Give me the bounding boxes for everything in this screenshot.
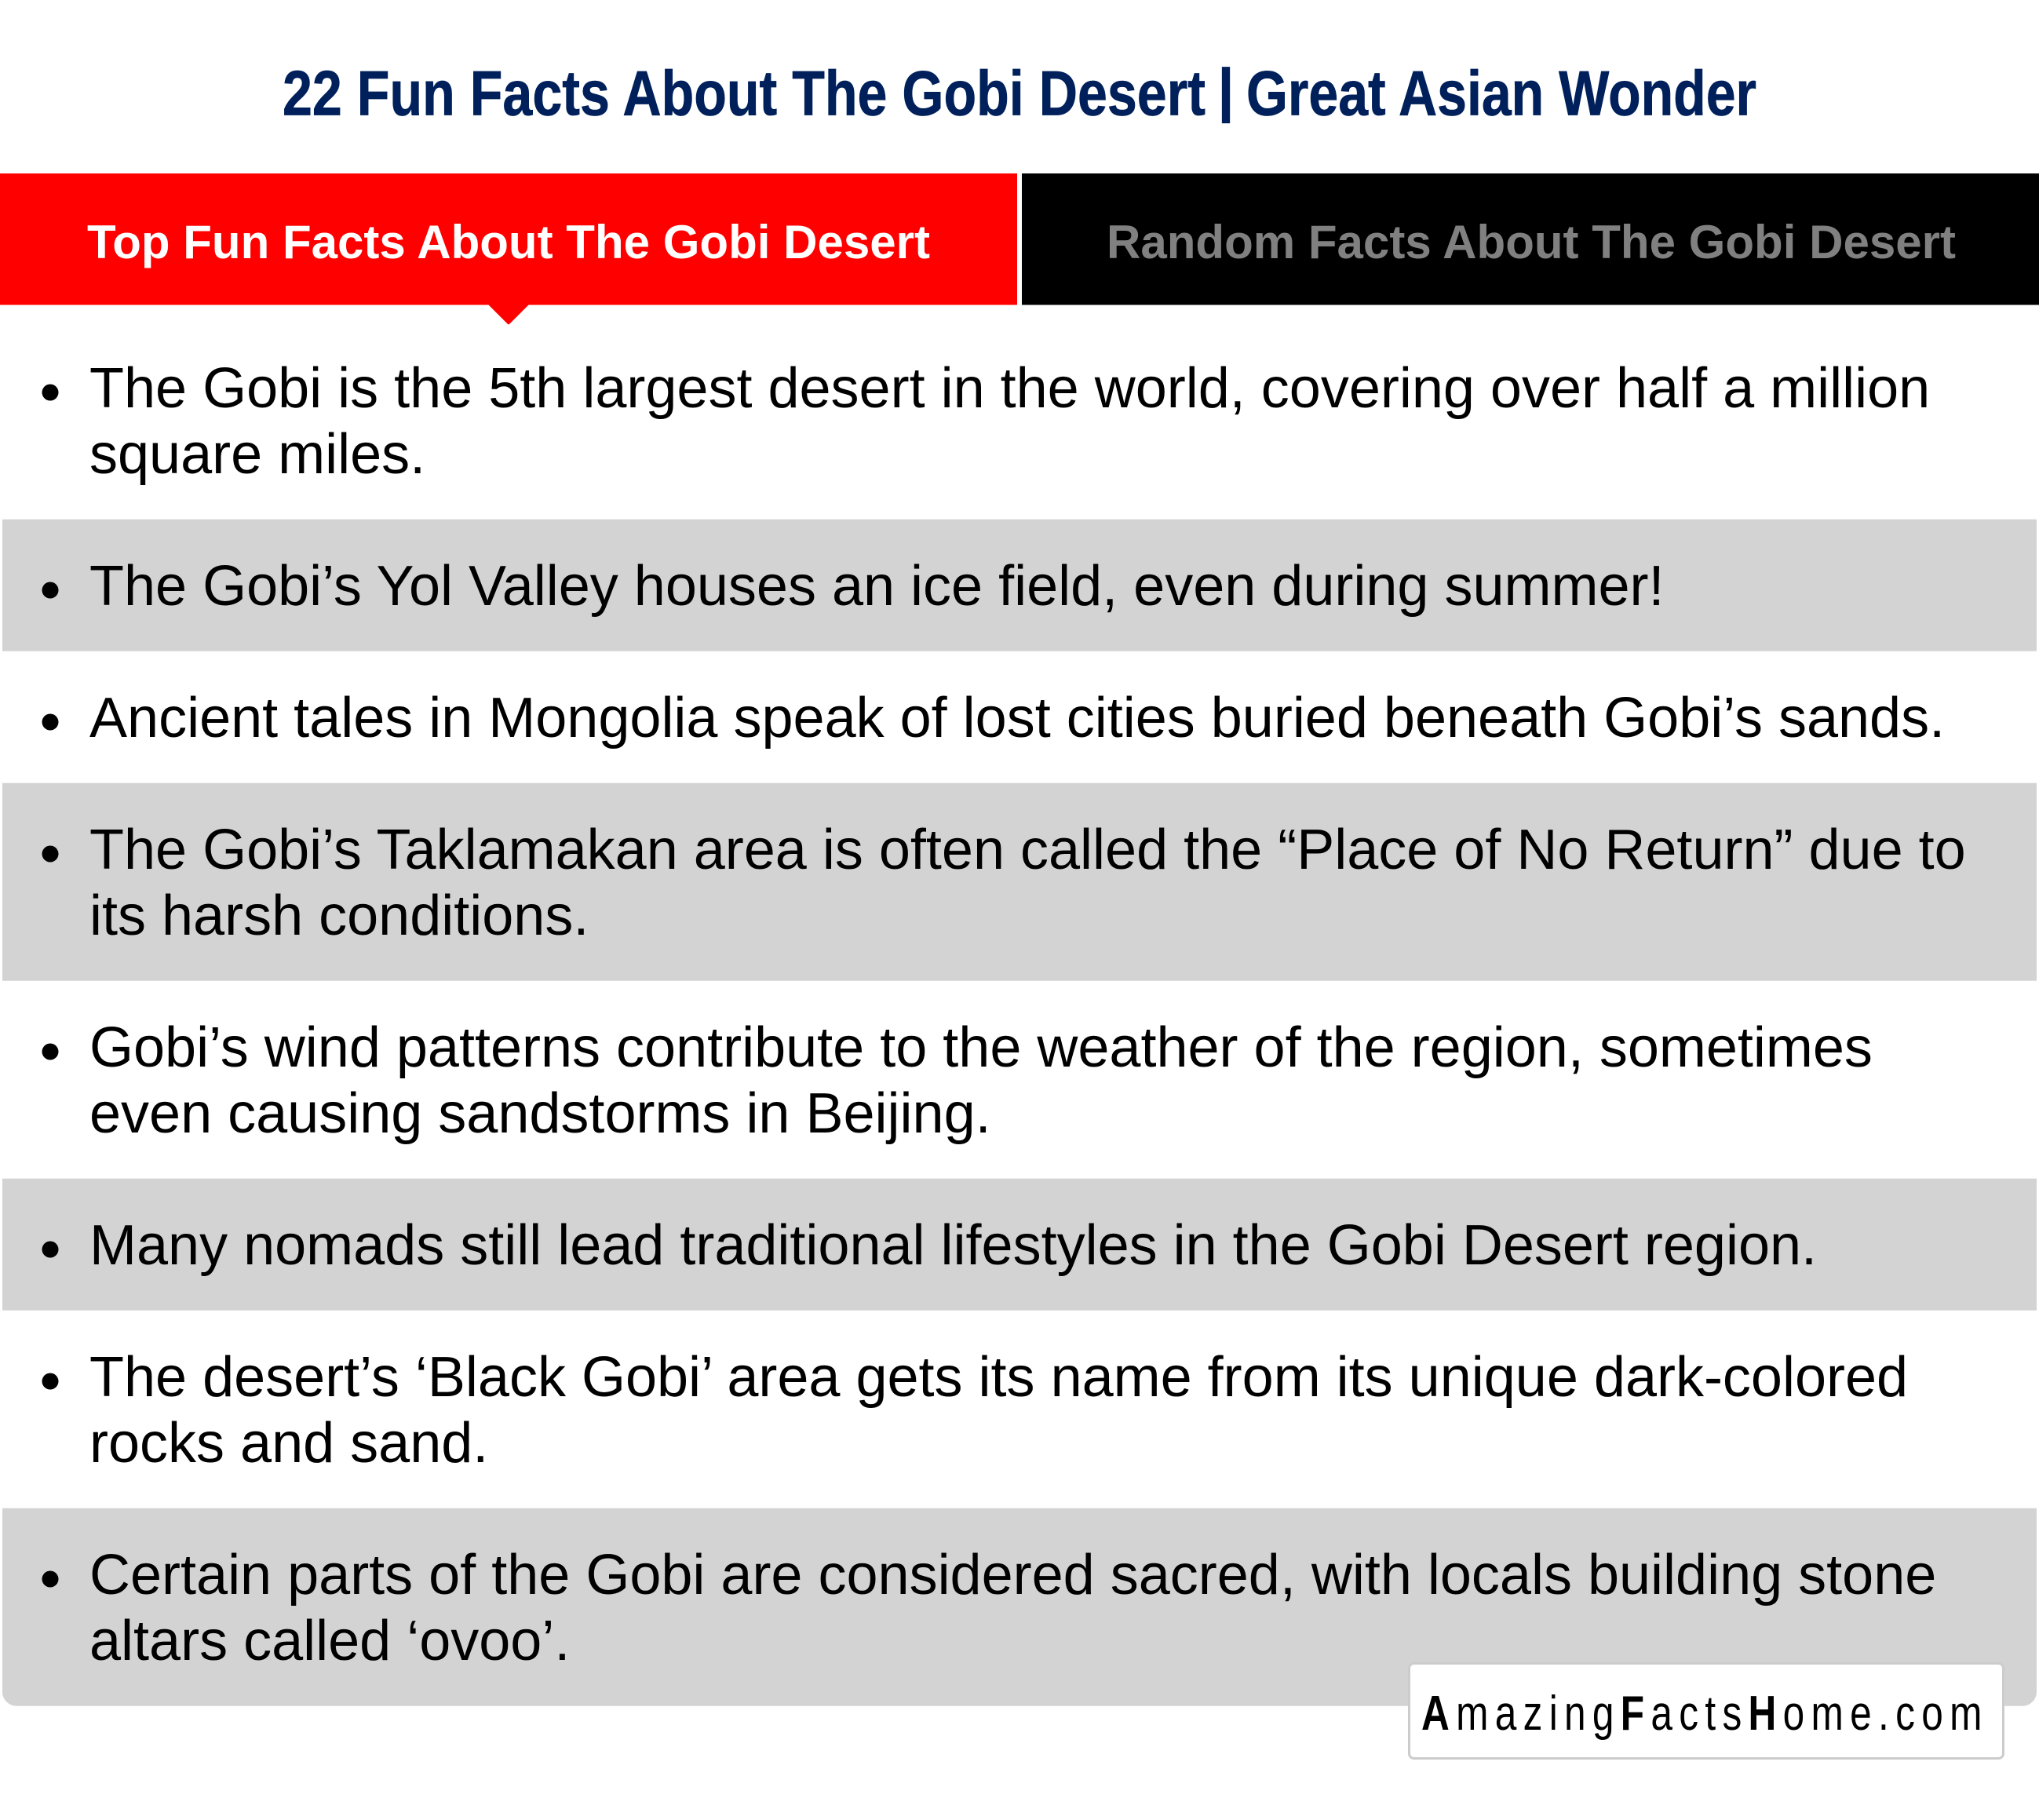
fact row 5: even causing sandstorms in Beijing. bbox=[89, 1082, 991, 1145]
tab: top fun facts (active) bbox=[0, 173, 1017, 325]
fact row 8: Certain parts of the Gobi are considered sacred, with locals building stone bbox=[89, 1544, 1936, 1607]
fact row 2 bbox=[2, 520, 2037, 651]
fact row 8 bbox=[2, 1508, 2037, 1706]
brand badge bbox=[1410, 1664, 2003, 1758]
fact row 5: Gobi’s wind patterns contribute to the weather of the region, sometimes bbox=[89, 1016, 1873, 1079]
fact row 6 bbox=[2, 1179, 2037, 1311]
fact row 7 bbox=[42, 1346, 1908, 1475]
fact row 4: its harsh conditions. bbox=[89, 884, 589, 947]
title: 22 Fun Facts About The Gobi Desert bbox=[283, 58, 1206, 129]
title: | bbox=[1218, 57, 1234, 123]
tab: random facts bbox=[1022, 173, 2039, 305]
title: Great Asian Wonder bbox=[1246, 58, 1756, 129]
tab: random facts: Random Facts About The Gobi Desert bbox=[1107, 216, 1956, 268]
fact row 2: The Gobi’s Yol Valley houses an ice field, even during summer! bbox=[89, 555, 1664, 618]
brand badge: AmazingFactsHome.com bbox=[1421, 1686, 1982, 1740]
fact row 7: rocks and sand. bbox=[89, 1412, 488, 1475]
fact row 1: square miles. bbox=[89, 423, 425, 486]
fact row 7: The desert’s ‘Black Gobi’ area gets its name from its unique dark-colored bbox=[89, 1346, 1908, 1409]
fact row 1 bbox=[42, 357, 1930, 486]
fact row 4 bbox=[2, 783, 2037, 981]
tab: top fun facts (active): Top Fun Facts About The Gobi Desert bbox=[87, 216, 930, 268]
fact row 5 bbox=[42, 1016, 1873, 1145]
fact row 8: altars called ‘ovoo’. bbox=[89, 1610, 570, 1672]
fact row 6: Many nomads still lead traditional lifestyles in the Gobi Desert region. bbox=[89, 1214, 1817, 1277]
fact row 3: Ancient tales in Mongolia speak of lost cities buried beneath Gobi’s sands. bbox=[89, 687, 1945, 750]
fact row 4: The Gobi’s Taklamakan area is often called the “Place of No Return” due to bbox=[89, 819, 1966, 881]
fact row 1: The Gobi is the 5th largest desert in the world, covering over half a million bbox=[89, 357, 1930, 420]
